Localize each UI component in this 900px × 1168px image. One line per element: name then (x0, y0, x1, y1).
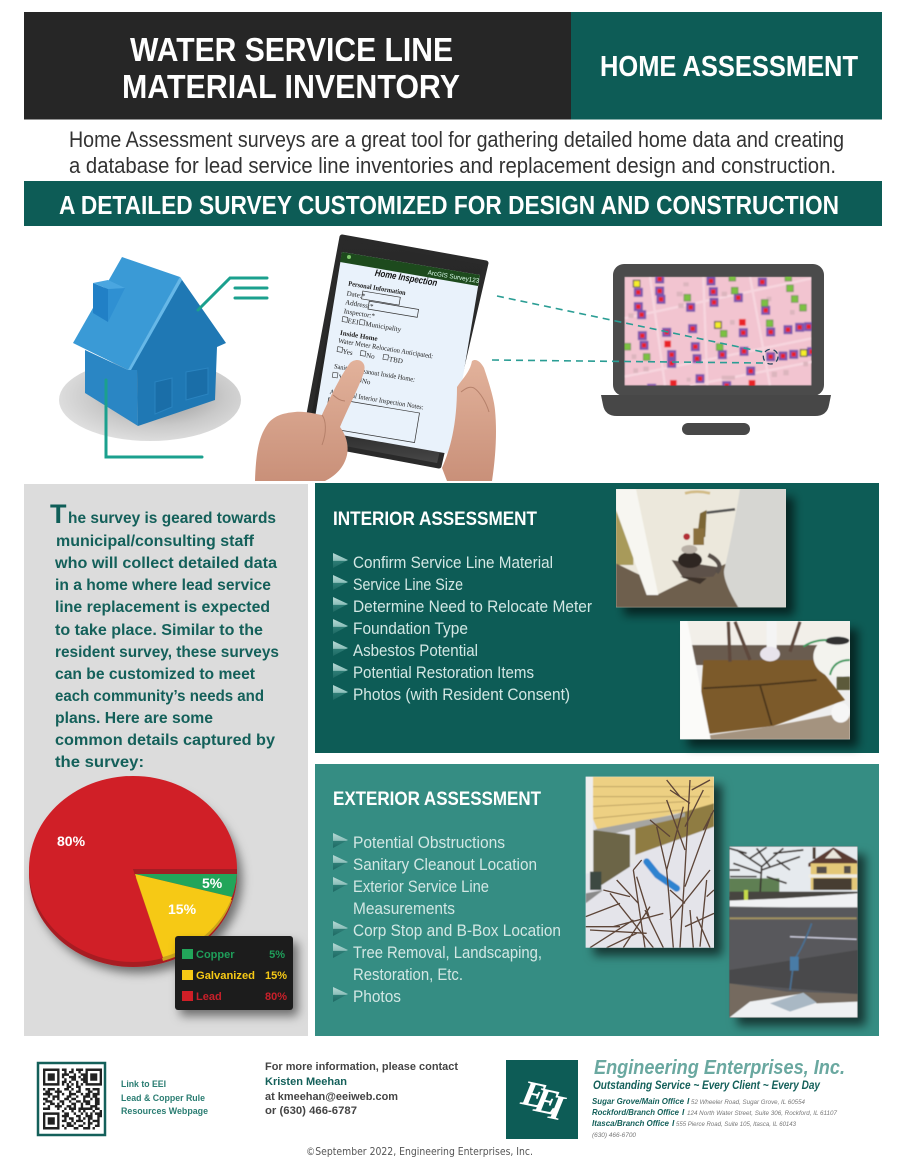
survey form text: Water Meter Relocation Anticipated: (338, 337, 434, 360)
title: WATER SERVICE LINE (130, 31, 453, 68)
description text: line replacement is expected (55, 599, 270, 616)
pie legend (175, 936, 293, 1010)
laptop with map (601, 264, 831, 435)
description text: common details captured by (55, 732, 275, 749)
intro text: a database for lead service line inventories and replacement design and construction. (69, 153, 836, 178)
contact information: For more information, please contact (265, 1061, 458, 1073)
bullet arrows (333, 553, 348, 700)
company name and offices: Sugar Grove/Main Office (592, 1096, 684, 1106)
panel: interior assessment (315, 483, 879, 753)
pie chart: 80% (57, 833, 86, 849)
description text: he survey is geared towards (68, 510, 276, 527)
company name and offices: (630) 466-6700 (592, 1132, 636, 1139)
description text: resident survey, these surveys (55, 644, 279, 661)
company name and offices: Engineering Enterprises, Inc. (594, 1057, 845, 1079)
exterior list: Tree Removal, Landscaping, (353, 943, 542, 962)
hands holding tablet (255, 360, 496, 481)
contact information: at kmeehan@eeiweb.com (265, 1091, 398, 1103)
survey form text: Additional Interior Inspection Notes: (329, 388, 424, 412)
EEI logo: I (545, 1086, 570, 1129)
pie legend: 5% (269, 949, 285, 961)
EEI logo (506, 1060, 578, 1139)
survey form text: Date:* (346, 289, 366, 300)
survey form text: Yes (342, 348, 354, 357)
description text: the survey: (55, 754, 144, 771)
company name and offices (592, 1057, 845, 1139)
description text: in a home where lead service (55, 577, 271, 594)
interior list: Service Line Size (353, 575, 463, 594)
tablet with survey form (304, 237, 486, 466)
exterior list: Exterior Service Line (353, 877, 489, 896)
pie legend: 80% (265, 991, 287, 1003)
survey form text: Inside Home (339, 329, 378, 343)
survey form text: Personal Information (348, 280, 406, 297)
pie chart (29, 776, 237, 967)
pie legend: Copper (196, 949, 235, 961)
interior list: Confirm Service Line Material (353, 553, 553, 572)
survey form text: Yes (338, 373, 349, 383)
description text: municipal/consulting staff (56, 533, 255, 550)
copyright: ©September 2022, Engineering Enterprises, Inc. (306, 1146, 533, 1158)
exterior list: Potential Obstructions (353, 833, 505, 852)
contact information: Kristen Meehan (265, 1076, 347, 1088)
company name and offices: 555 Pierce Road, Suite 105, Itasca, IL 60143 (676, 1121, 796, 1128)
QR caption: Resources Webpage (121, 1106, 208, 1117)
callout lines from house (106, 278, 267, 457)
survey form text: ArcGIS Survey123 (427, 269, 480, 285)
QR caption (121, 1079, 208, 1117)
exterior list: Photos (353, 987, 401, 1006)
survey form text: EEI (347, 317, 360, 327)
QR caption: Lead & Copper Rule (121, 1093, 205, 1104)
exterior list: Corp Stop and B-Box Location (353, 921, 561, 940)
pie legend: 15% (265, 970, 287, 982)
contact information: or (630) 466-6787 (265, 1105, 357, 1117)
panel: survey description and pie chart (24, 484, 308, 1036)
description text: plans. Here are some (55, 710, 213, 727)
pie chart: 5% (202, 875, 223, 891)
photo: floor pit (680, 621, 860, 739)
heading: EXTERIOR ASSESSMENT (333, 788, 541, 810)
interior list: Photos (with Resident Consent) (353, 685, 570, 704)
contact information (265, 1061, 458, 1117)
survey form text: No (366, 351, 376, 361)
company name and offices: 124 North Water Street, Suite 306, Rockford, IL 61107 (687, 1110, 837, 1117)
QR code (38, 1063, 105, 1135)
company name and offices: Rockford/Branch Office (592, 1107, 679, 1117)
interior list: Potential Restoration Items (353, 663, 534, 682)
interior list: Asbestos Potential (353, 641, 478, 660)
survey form text: TBD (388, 355, 403, 365)
survey form text: Sanitary Cleanout Inside Home: (333, 362, 416, 384)
company name and offices: I (687, 1096, 690, 1106)
icon: blue house (59, 257, 241, 441)
company name and offices: Itasca/Branch Office (592, 1118, 669, 1128)
company name and offices: I (682, 1107, 685, 1117)
description text: T (50, 499, 67, 529)
pie chart: 15% (168, 901, 197, 917)
pie legend: Galvanized (196, 970, 255, 982)
bullet arrows (333, 833, 348, 1002)
survey form text: Address:* (345, 298, 374, 311)
EEI logo: E (530, 1079, 563, 1123)
company name and offices: 52 Wheeler Road, Sugar Grove, IL 60554 (691, 1099, 805, 1106)
photo: street and house (729, 846, 858, 1018)
QR caption: Link to EEI (121, 1079, 166, 1090)
header: home assessment tab: HOME ASSESSMENT (600, 51, 858, 83)
title: MATERIAL INVENTORY (122, 68, 460, 105)
exterior list: Sanitary Cleanout Location (353, 855, 537, 874)
section band heading (24, 181, 882, 226)
exterior list: Restoration, Etc. (353, 965, 463, 984)
description text: to take place. Similar to the (55, 622, 263, 639)
photo: snow and shrub (586, 777, 714, 948)
survey form text (324, 257, 480, 449)
panel: exterior assessment (315, 764, 879, 1036)
header: title block (24, 12, 571, 120)
description text: can be customized to meet (55, 666, 255, 683)
description text: who will collect detailed data (54, 555, 277, 572)
interior list: Foundation Type (353, 619, 468, 638)
survey form text: Home Inspection (374, 268, 438, 289)
description text: each community’s needs and (55, 688, 264, 705)
company name and offices: Outstanding Service ~ Every Client ~ Every Day (593, 1080, 821, 1092)
header: home assessment tab (571, 12, 882, 120)
survey form text: Inspector:* (343, 307, 376, 320)
photo: water meter (616, 489, 786, 607)
survey form text: Municipality (365, 320, 402, 334)
exterior list: Measurements (353, 899, 455, 918)
dashed connector lines (492, 296, 763, 363)
company name and offices: I (672, 1118, 675, 1128)
map markers (624, 274, 815, 392)
pie legend: Lead (196, 991, 222, 1003)
description text (50, 499, 279, 771)
heading: INTERIOR ASSESSMENT (333, 508, 537, 530)
EEI logo: E (517, 1072, 550, 1116)
interior list: Determine Need to Relocate Meter (353, 597, 592, 616)
survey form text: No (361, 377, 372, 387)
